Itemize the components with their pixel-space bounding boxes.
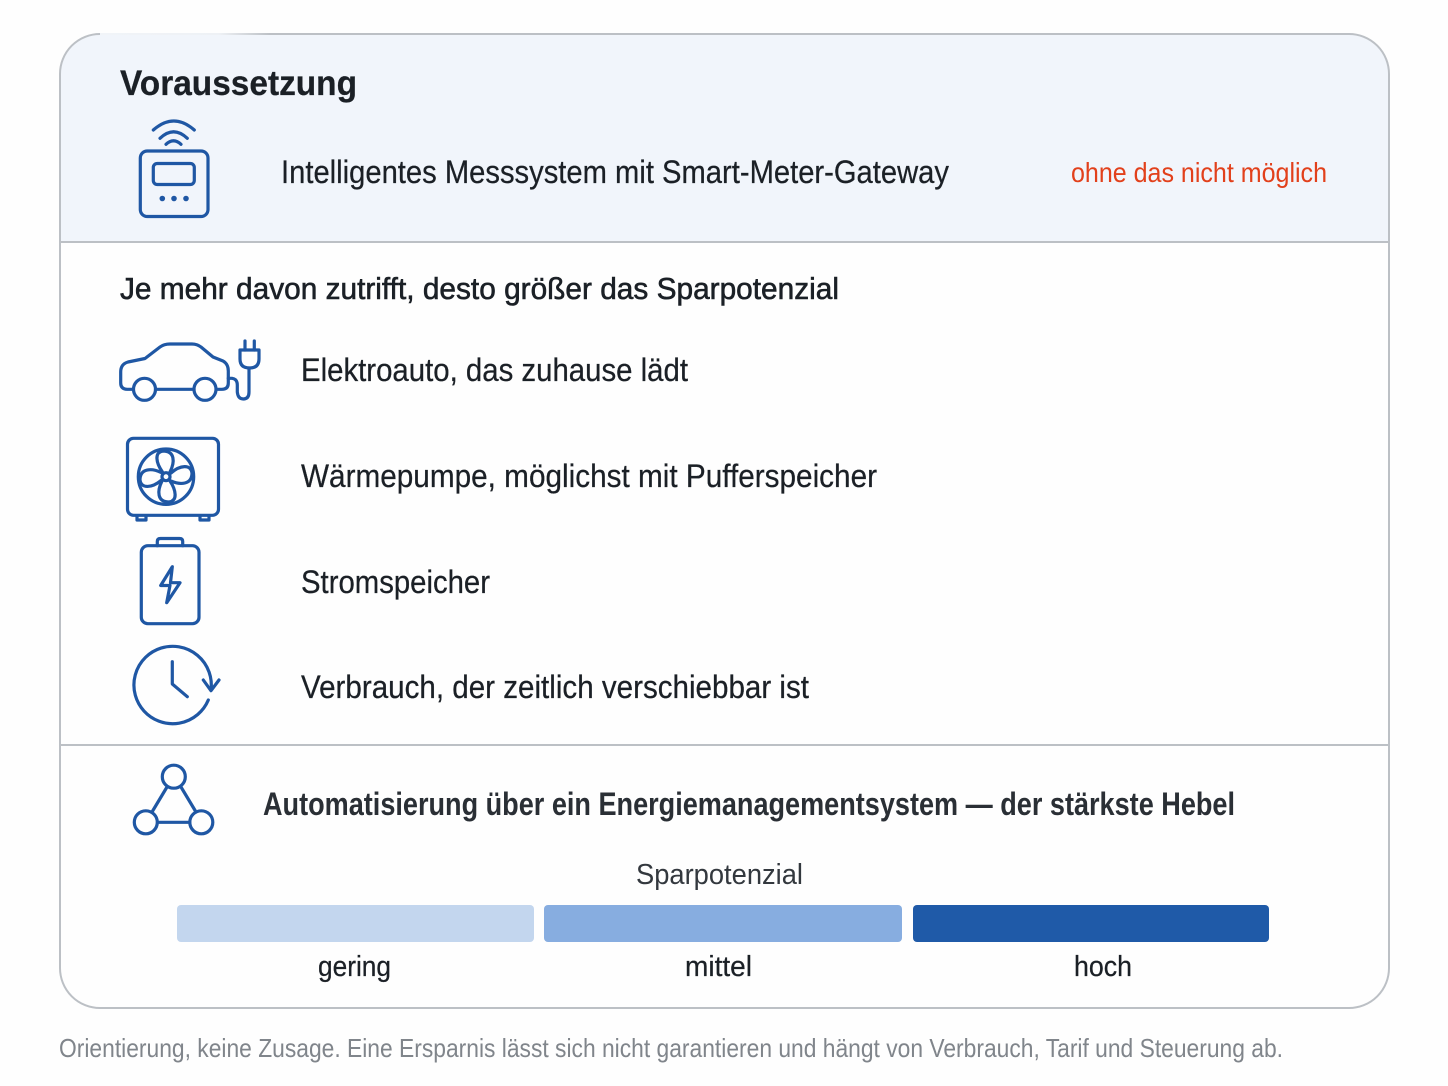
scale bar: mittel: mittel: [685, 951, 752, 983]
footnote: Orientierung, keine Zusage. Eine Ersparnis lässt sich nicht garantieren und hängt von Verbrauch, Tarif und Steuerung ab.: [59, 1033, 1283, 1063]
scale bar: hoch: hoch: [1074, 951, 1132, 983]
chart title: Sparpotenzial: Sparpotenzial: [636, 859, 803, 891]
text: smart meter gateway: Intelligentes Messsystem mit Smart-Meter-Gateway: [281, 154, 949, 190]
heading: Voraussetzung: Voraussetzung: [120, 64, 357, 103]
scale bar: hoch: [913, 905, 1269, 983]
icon: heat pump: [128, 438, 218, 520]
text: heat pump: Wärmepumpe, möglichst mit Pufferspeicher: [301, 458, 877, 494]
icon: electric car with plug: [121, 341, 259, 400]
icon: battery: [141, 538, 199, 624]
text: battery storage: Stromspeicher: [301, 564, 490, 600]
text: electric car: Elektroauto, das zuhause lädt: [301, 352, 688, 388]
panel: prerequisite background: [60, 34, 1389, 242]
scale bar: gering: [177, 905, 534, 983]
icon: smart meter gateway: [140, 121, 208, 216]
text: automation lever: Automatisierung über ein Energiemanagementsystem — der stärkste Hebel: [263, 786, 1235, 822]
icon: clock with arrow: [134, 646, 219, 724]
scale bar: gering: gering: [318, 951, 391, 983]
icon: network triangle: [134, 765, 213, 834]
scale bar: mittel: [544, 905, 902, 983]
callout: required note: ohne das nicht möglich: [1071, 157, 1327, 188]
text: shiftable consumption: Verbrauch, der zeitlich verschiebbar ist: [301, 669, 809, 705]
heading: savings condition: Je mehr davon zutrifft, desto größer das Sparpotenzial: [120, 271, 839, 306]
